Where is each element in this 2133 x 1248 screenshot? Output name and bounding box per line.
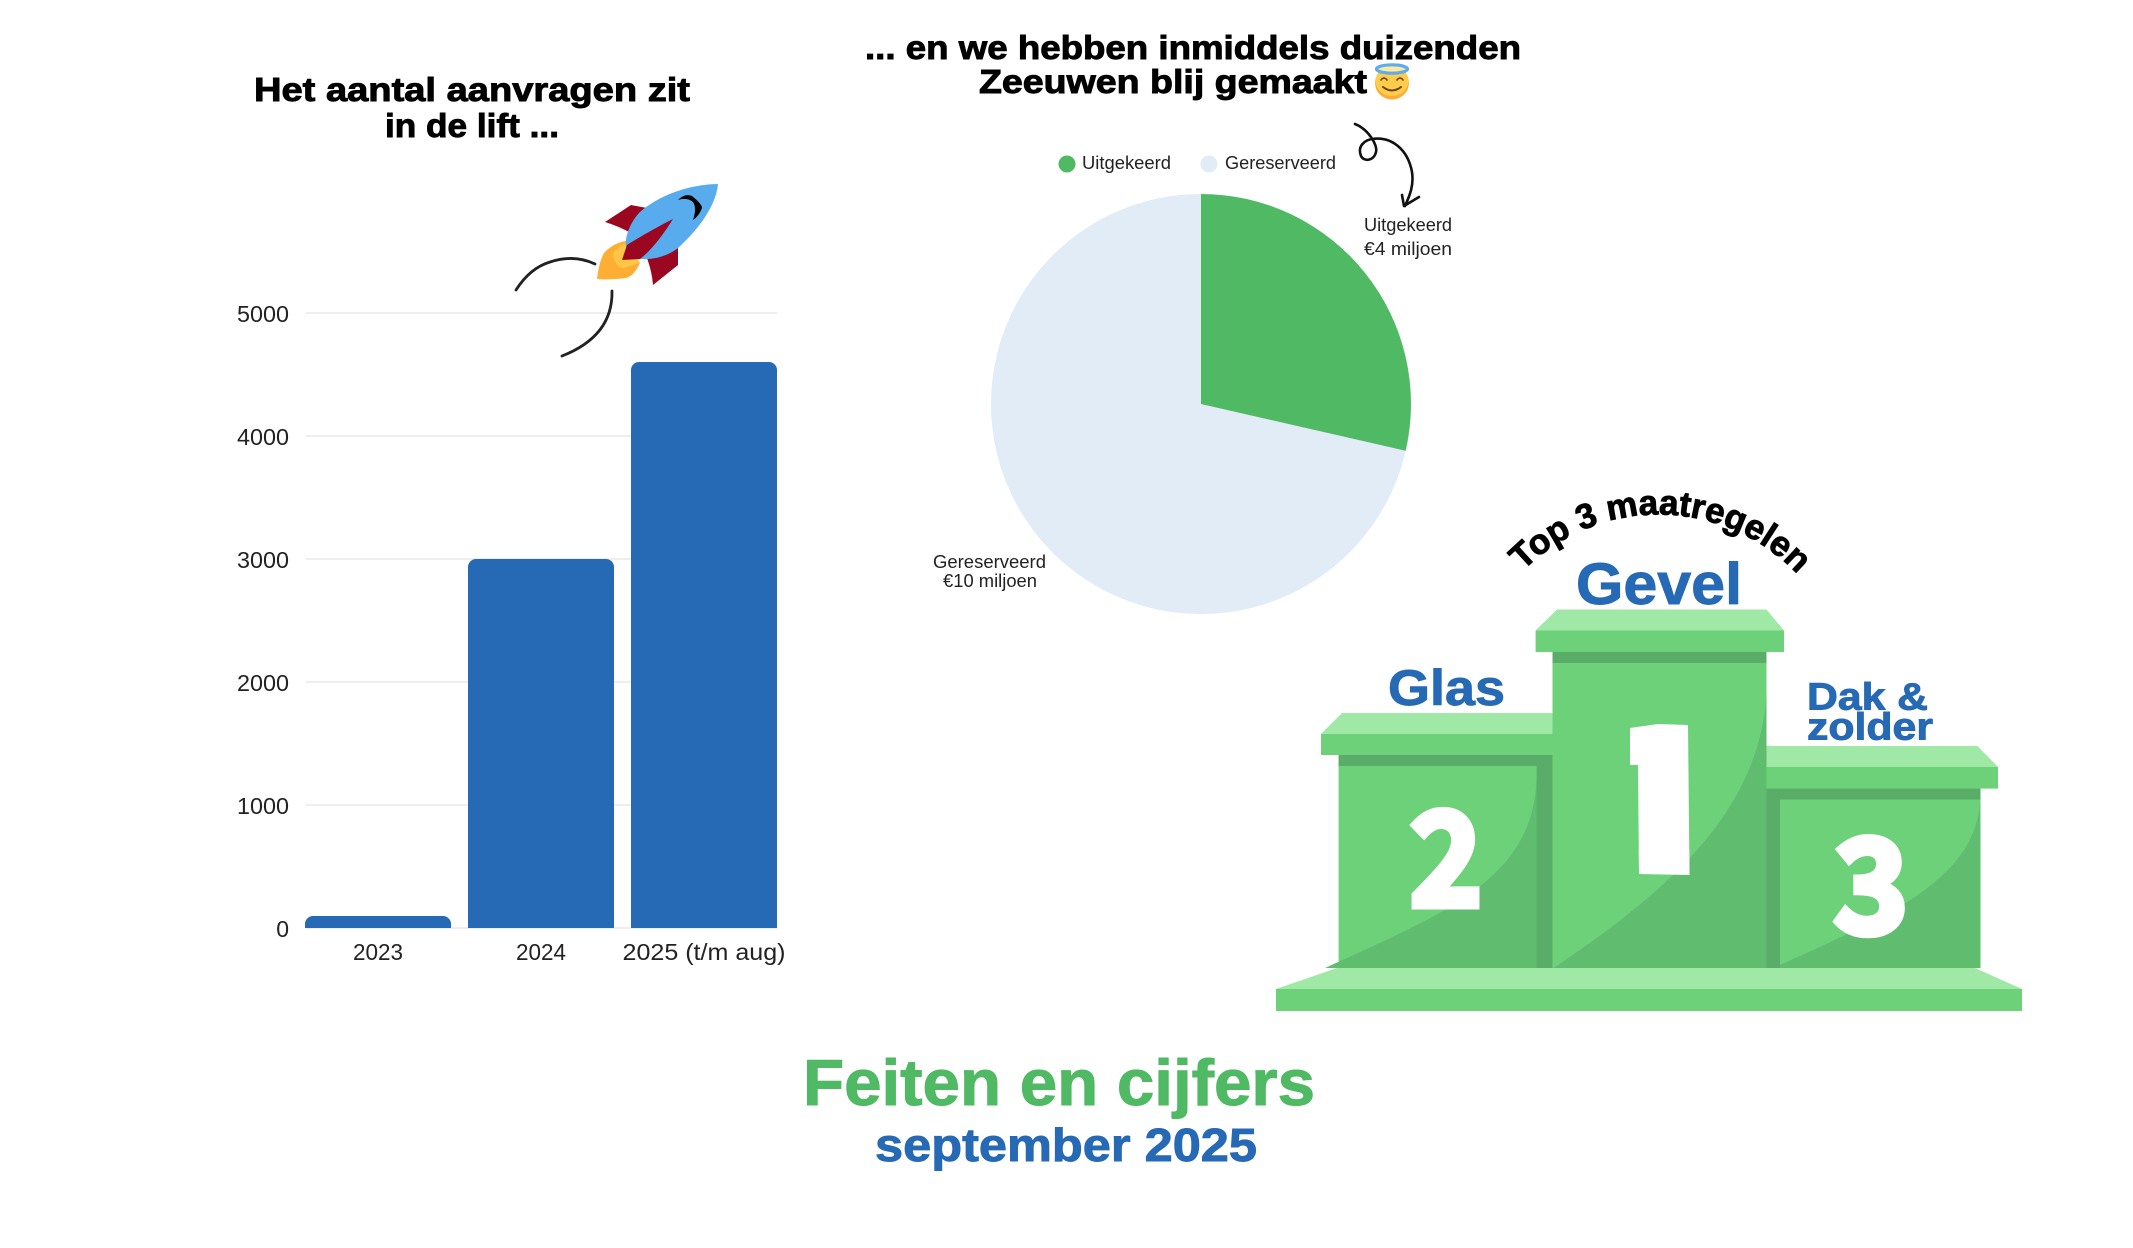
arrow: squiggle to Uitgekeerd bbox=[1355, 124, 1419, 206]
bar chart: aanvragen per jaar: 2025 (t/m aug) bbox=[622, 939, 786, 965]
bar chart: aanvragen per jaar: 5000 bbox=[237, 301, 289, 327]
legend: Gereserveerd bbox=[1225, 153, 1336, 173]
heading: aanvragen: in de lift ... bbox=[385, 107, 559, 144]
podium bbox=[1276, 610, 2022, 1011]
label: Uitgekeerd: Uitgekeerd bbox=[1364, 215, 1452, 235]
label: Gereserveerd: Gereserveerd bbox=[933, 552, 1046, 572]
main title: Feiten en cijfers bbox=[803, 1046, 1315, 1119]
subtitle: september 2025 bbox=[875, 1119, 1257, 1171]
label: Gereserveerd: €10 miljoen bbox=[943, 571, 1037, 591]
label: Gereserveerd bbox=[933, 552, 1046, 591]
podium place 2 bbox=[1321, 713, 1554, 968]
bar chart: aanvragen per jaar: 2023 bbox=[353, 939, 403, 965]
heading: duizenden Zeeuwen bbox=[865, 29, 1521, 100]
curved title: Top 3 maatregelen: Top 3 maatregelen bbox=[1506, 492, 1808, 574]
podium place 1 bbox=[1536, 610, 1784, 968]
label: Dak & zolder bbox=[1807, 676, 1933, 748]
podium base bbox=[1276, 968, 2022, 1011]
heading: aanvragen bbox=[254, 71, 690, 144]
bar chart: aanvragen per jaar: 2000 bbox=[237, 670, 289, 696]
label: Glas: Glas bbox=[1388, 660, 1505, 716]
legend: Uitgekeerd bbox=[1082, 153, 1171, 173]
label: Gevel: Gevel bbox=[1576, 552, 1742, 617]
bar chart: aanvragen per jaar: 3000 bbox=[237, 547, 289, 573]
bar chart: aanvragen per jaar bbox=[237, 301, 786, 965]
heading: duizenden Zeeuwen: ... en we hebben inmiddels duizenden bbox=[865, 29, 1521, 66]
heading: aanvragen: Het aantal aanvragen zit bbox=[254, 71, 690, 108]
icon: smiling face with halo bbox=[1375, 65, 1409, 100]
label: Dak & zolder: Dak & bbox=[1807, 676, 1928, 718]
bar chart: aanvragen per jaar: 0 bbox=[276, 916, 289, 942]
label: Uitgekeerd: €4 miljoen bbox=[1364, 239, 1452, 259]
icon: rocket trail lines bbox=[516, 258, 612, 356]
heading: duizenden Zeeuwen: Zeeuwen blij gemaakt bbox=[979, 63, 1367, 100]
podium place 3: 3 bbox=[1833, 784, 1909, 971]
bar chart: aanvragen per jaar: 1000 bbox=[237, 793, 289, 819]
bar chart: aanvragen per jaar: 4000 bbox=[237, 424, 289, 450]
podium place 3 bbox=[1766, 746, 1998, 971]
icon: rocket bbox=[597, 184, 718, 285]
bar chart: aanvragen per jaar: 2024 bbox=[516, 939, 566, 965]
podium number 1: 1 bbox=[1601, 637, 1721, 934]
podium place 2: 2 bbox=[1410, 755, 1482, 944]
pie chart bbox=[991, 194, 1411, 614]
label: Uitgekeerd bbox=[1364, 215, 1452, 259]
legend bbox=[1058, 153, 1336, 173]
label: Dak & zolder: zolder bbox=[1807, 706, 1933, 748]
